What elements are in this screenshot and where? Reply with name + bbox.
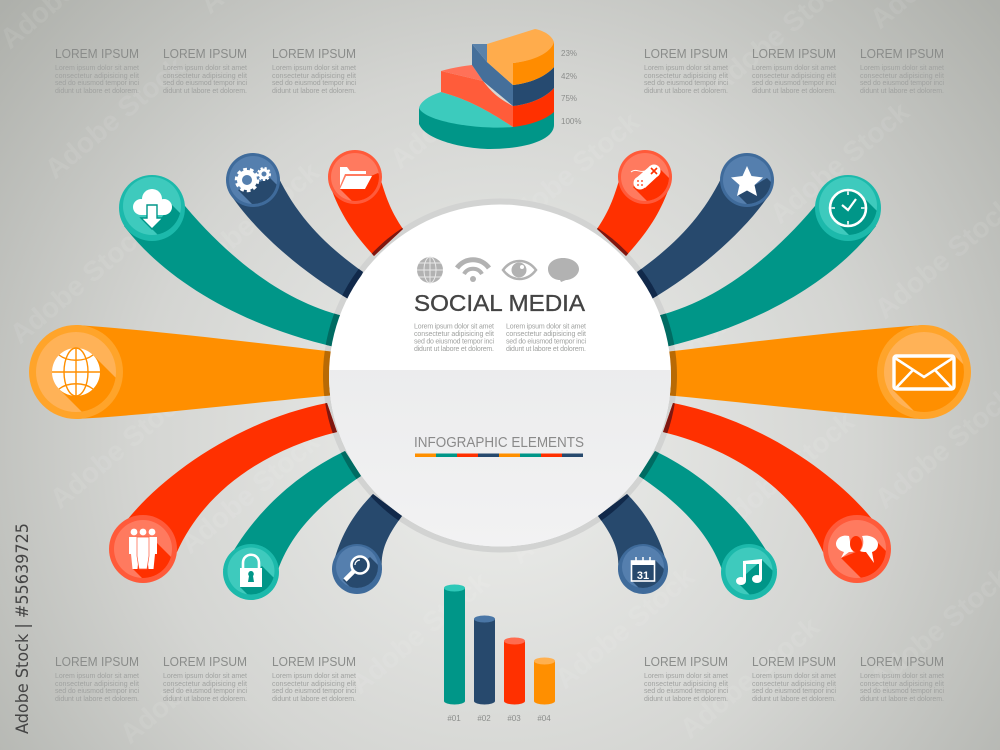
watermark: Adobe Stock <box>549 561 700 695</box>
icon: grey globe <box>417 257 443 283</box>
text blocks: top left: Lorem ipsum dolor sit amet <box>163 65 247 72</box>
icon: envelope badge <box>877 325 971 419</box>
text blocks: top left: consectetur adipisicing elit <box>272 73 356 80</box>
watermark: Adobe Stock <box>494 106 645 240</box>
centre text: right column <box>506 324 586 353</box>
text blocks: top left <box>55 47 356 95</box>
text blocks: bottom right: Lorem ipsum dolor sit amet <box>752 673 836 680</box>
text blocks: bottom left <box>55 655 356 703</box>
icon: game controller badge <box>618 150 672 204</box>
text blocks: top right: Lorem ipsum dolor sit amet <box>752 65 836 72</box>
text blocks: bottom left: LOREM IPSUM <box>272 655 356 669</box>
text blocks: top right: Lorem ipsum dolor sit amet <box>644 65 728 72</box>
text blocks: bottom left: consectetur adipisicing elit <box>272 681 356 688</box>
text blocks: bottom right <box>644 655 944 703</box>
text blocks: top left: LOREM IPSUM <box>163 47 247 61</box>
text blocks: bottom right: sed do eiusmod tempor inci <box>752 688 836 695</box>
bar chart: #04 <box>537 714 551 723</box>
text blocks: top right: LOREM IPSUM <box>752 47 836 61</box>
text blocks: top left: consectetur adipisicing elit <box>163 73 247 80</box>
icon: grey speech bubble <box>548 258 579 282</box>
icon: music note badge <box>721 544 777 600</box>
title: SOCIAL MEDIA <box>414 290 586 316</box>
icon: speech bubbles badge <box>823 515 891 583</box>
text blocks: bottom left: Lorem ipsum dolor sit amet <box>55 673 139 680</box>
watermark: Adobe Stock <box>384 41 535 175</box>
watermark: Adobe Stock <box>674 611 825 745</box>
watermark: Adobe Stock <box>709 406 860 540</box>
centre text: left column <box>414 324 494 353</box>
bar 03 <box>504 638 525 704</box>
watermark: Adobe <box>114 670 201 750</box>
arm base shadows <box>76 170 924 570</box>
text blocks: bottom left: sed do eiusmod tempor inci <box>163 688 247 695</box>
centre text: right column: didunt ut labore et dolorem. <box>506 346 586 353</box>
text blocks: top right: consectetur adipisicing elit <box>752 73 836 80</box>
centre text: left column: sed do eiusmod tempor inci <box>414 338 494 346</box>
text blocks: top right: Lorem ipsum dolor sit amet <box>860 65 944 72</box>
text blocks: bottom right: sed do eiusmod tempor inci <box>644 688 728 695</box>
text blocks: bottom right: didunt ut labore et dolorem. <box>860 696 944 703</box>
text blocks: top right: consectetur adipisicing elit <box>644 73 728 80</box>
watermark: Adobe Stock <box>174 426 325 560</box>
icon: people badge <box>109 515 177 583</box>
text blocks: top left: Lorem ipsum dolor sit amet <box>55 65 139 72</box>
text blocks: top right: LOREM IPSUM <box>860 47 944 61</box>
icon: calendar badge: 31 <box>637 570 649 582</box>
text blocks: top left: sed do eiusmod tempor inci <box>163 80 247 87</box>
centre text: left column: Lorem ipsum dolor sit amet <box>414 324 494 330</box>
text blocks: top right: didunt ut labore et dolorem. <box>752 88 836 95</box>
text blocks: bottom left: didunt ut labore et dolorem. <box>163 696 247 703</box>
icon: globe badge <box>29 325 123 419</box>
text blocks: bottom right: sed do eiusmod tempor inci <box>860 688 944 695</box>
stepped 3D pie chart: 75% <box>561 94 577 103</box>
text blocks: bottom left: Lorem ipsum dolor sit amet <box>272 673 356 680</box>
central circle ring <box>323 198 677 552</box>
stepped 3D pie chart: 42% <box>561 72 577 81</box>
bar chart: #03 <box>507 714 521 723</box>
text blocks: bottom right: consectetur adipisicing elit <box>644 681 728 688</box>
text blocks: bottom right: Lorem ipsum dolor sit amet <box>644 673 728 680</box>
text blocks: top right: didunt ut labore et dolorem. <box>644 88 728 95</box>
bar chart: #02 <box>477 714 491 723</box>
text blocks: bottom left: sed do eiusmod tempor inci <box>272 688 356 695</box>
centre text: left column: consectetur adipisicing elit <box>414 331 494 338</box>
stock caption: Adobe Stock | #55639725 <box>13 523 33 734</box>
text blocks: top right <box>644 47 944 95</box>
icon: cloud download badge <box>119 175 185 241</box>
stepped 3D pie chart: 23% <box>561 49 577 58</box>
text blocks: bottom left: Lorem ipsum dolor sit amet <box>163 673 247 680</box>
text blocks: bottom right: LOREM IPSUM <box>644 655 728 669</box>
icon: grey wifi <box>457 260 489 282</box>
text blocks: bottom right: consectetur adipisicing elit <box>860 681 944 688</box>
text blocks: top left: didunt ut labore et dolorem. <box>55 88 139 95</box>
icon: padlock badge <box>223 544 279 600</box>
text blocks: top left: LOREM IPSUM <box>272 47 356 61</box>
bar 04 <box>534 658 555 704</box>
centre text: right column: Lorem ipsum dolor sit amet <box>506 324 586 330</box>
centre text: left column: didunt ut labore et dolorem. <box>414 346 494 353</box>
icon: folder badge <box>328 150 382 204</box>
text blocks: bottom right: didunt ut labore et dolorem. <box>644 696 728 703</box>
text blocks: top left: LOREM IPSUM <box>55 47 139 61</box>
text blocks: top right: sed do eiusmod tempor inci <box>752 80 836 87</box>
text blocks: top right: LOREM IPSUM <box>644 47 728 61</box>
text blocks: bottom right: LOREM IPSUM <box>752 655 836 669</box>
watermark: Adobe Stock <box>44 381 195 515</box>
text blocks: bottom right: didunt ut labore et dolorem. <box>752 696 836 703</box>
text blocks: top left: consectetur adipisicing elit <box>55 73 139 80</box>
stepped 3D pie chart: 100% <box>561 117 581 126</box>
text blocks: bottom right: consectetur adipisicing elit <box>752 681 836 688</box>
text blocks: top left: didunt ut labore et dolorem. <box>272 88 356 95</box>
text blocks: bottom left: LOREM IPSUM <box>163 655 247 669</box>
text blocks: bottom left: didunt ut labore et dolorem. <box>55 696 139 703</box>
watermark: Adobe Stock <box>39 51 190 185</box>
watermark: Adobe Stock <box>174 156 325 290</box>
bar 02 <box>474 616 495 704</box>
text blocks: top right: didunt ut labore et dolorem. <box>860 88 944 95</box>
text blocks: top left: sed do eiusmod tempor inci <box>272 80 356 87</box>
text blocks: top left: didunt ut labore et dolorem. <box>163 88 247 95</box>
watermark: Adobe Stock <box>334 266 485 400</box>
arms: right side <box>597 170 924 570</box>
icon: grey eye <box>503 261 536 279</box>
central circle panel <box>329 204 671 546</box>
arms: left side <box>76 170 403 570</box>
text blocks: bottom left: consectetur adipisicing elit <box>163 681 247 688</box>
text blocks: bottom right: LOREM IPSUM <box>860 655 944 669</box>
watermark: Adobe Stock <box>504 436 655 570</box>
icon: gears badge <box>226 153 280 207</box>
text blocks: top right: consectetur adipisicing elit <box>860 73 944 80</box>
text blocks: bottom left: LOREM IPSUM <box>55 655 139 669</box>
text blocks: bottom left: didunt ut labore et dolorem. <box>272 696 356 703</box>
watermark: Adobe Stock <box>764 96 915 230</box>
bar chart <box>444 584 555 723</box>
centre text: right column: sed do eiusmod tempor inci <box>506 338 586 346</box>
text blocks: top right: sed do eiusmod tempor inci <box>860 80 944 87</box>
icon: clock badge <box>815 175 881 241</box>
bar chart: #01 <box>447 714 461 723</box>
icon row: globe, wifi, eye, speech <box>417 257 579 283</box>
icon: magnifier badge <box>332 544 382 594</box>
watermark: Adobe Stock <box>4 216 155 350</box>
subtitle: INFOGRAPHIC ELEMENTS <box>414 435 584 451</box>
colour stripe <box>415 454 583 457</box>
text blocks: bottom right: Lorem ipsum dolor sit amet <box>860 673 944 680</box>
icon: star badge <box>720 153 774 207</box>
text blocks: bottom left: sed do eiusmod tempor inci <box>55 688 139 695</box>
watermark: Adobe Stock <box>344 566 495 700</box>
text blocks: top left: sed do eiusmod tempor inci <box>55 80 139 87</box>
centre text: right column: consectetur adipisicing elit <box>506 331 586 338</box>
text blocks: bottom left: consectetur adipisicing elit <box>55 681 139 688</box>
text blocks: top right: sed do eiusmod tempor inci <box>644 80 728 87</box>
icon: calendar badge <box>618 544 668 594</box>
watermark: Adobe Stock <box>664 241 815 375</box>
stepped 3D pie chart <box>419 29 581 149</box>
text blocks: top left: Lorem ipsum dolor sit amet <box>272 65 356 72</box>
bar 01 <box>444 584 465 704</box>
